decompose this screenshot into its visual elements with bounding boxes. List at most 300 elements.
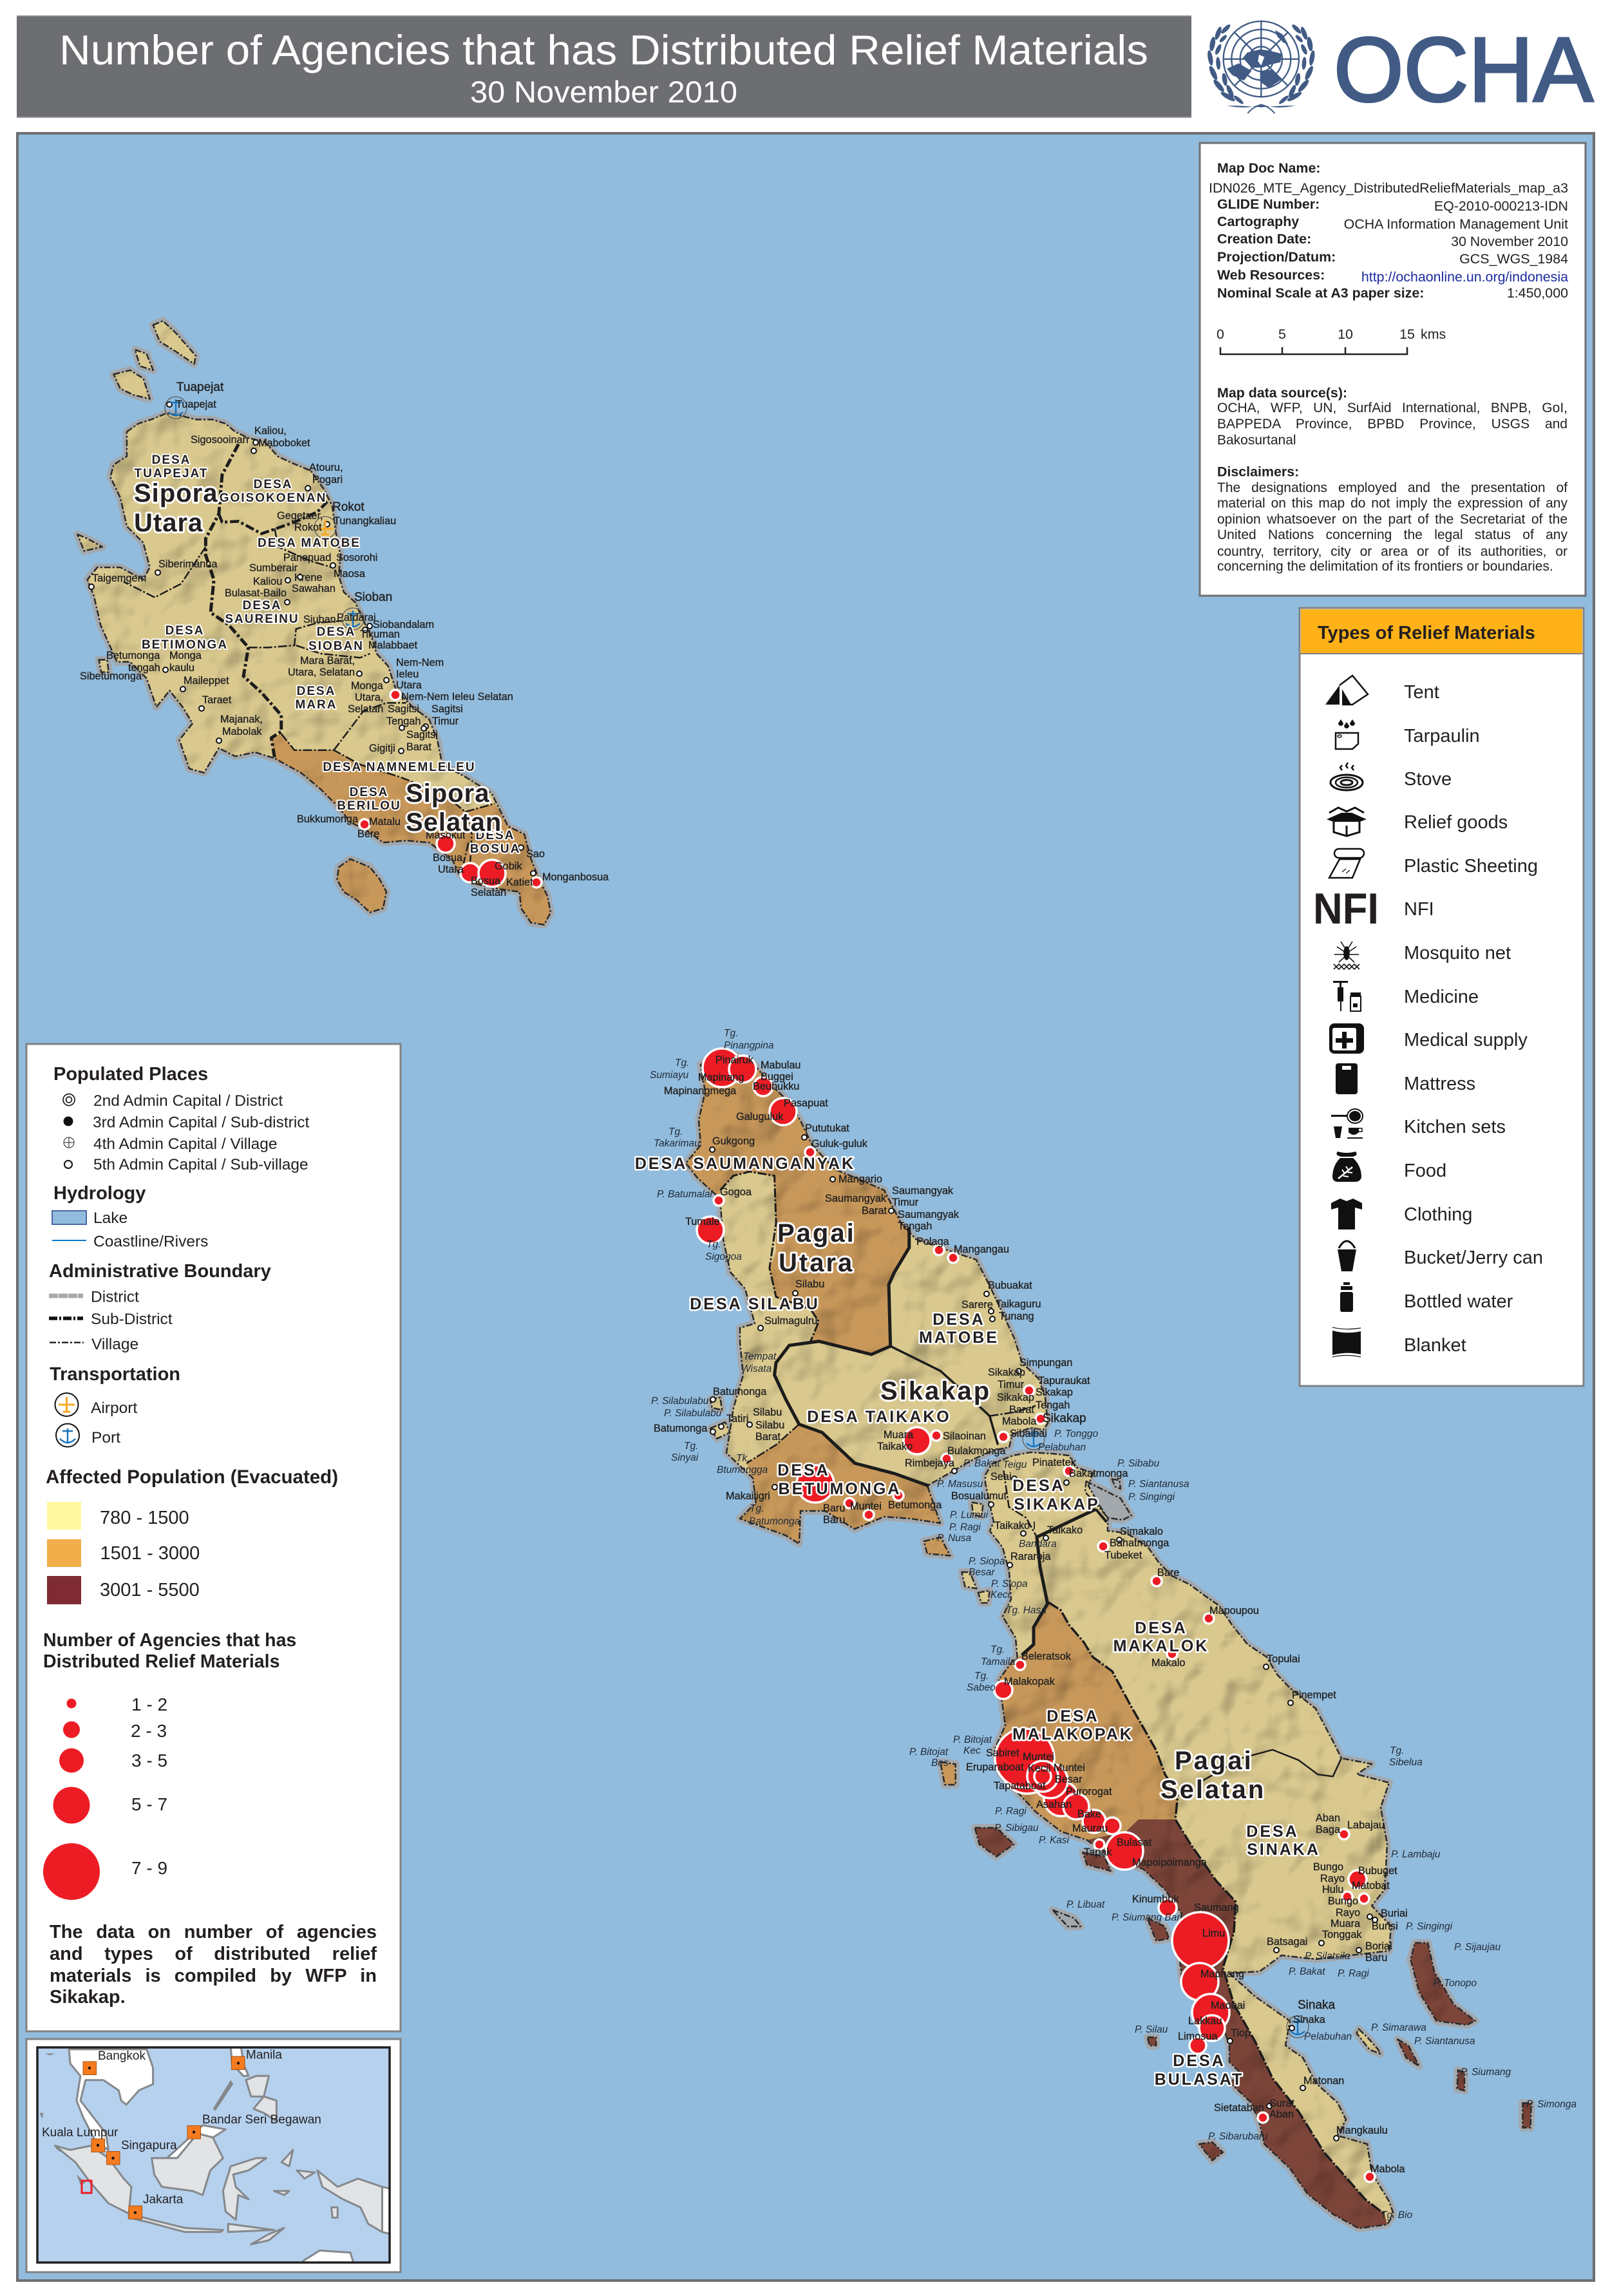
map: Pagai place names: Topulai [1267,1653,1300,1665]
map: Pagai place names: Sibaibai [1010,1428,1047,1439]
map: Pagai place names: Tapataboat [994,1780,1046,1792]
map: Pagai village (desa) labels: MAKALOK [1113,1637,1209,1655]
map: capes and island names: Kec [963,1745,981,1756]
panel: map information: GLIDE Number: [1217,196,1320,212]
title banner: 30 November 2010 [470,75,737,109]
map: Sipora village (desa) labels: MARA [295,698,337,712]
map: Pagai place names: Tengah [1036,1399,1070,1411]
legend: populated places: Populated Places [53,1064,208,1085]
map: capes and island names: P. Tonopo [1433,1978,1477,1989]
map: capes and island names: Tg. [724,1028,738,1039]
map: capes and island names: P. Sibabu [1117,1458,1160,1469]
inset: capital names: Singapura [121,2139,177,2152]
inset: capital names: Bandar Seri Begawan [202,2113,321,2127]
map: Pagai place names: Tonggak [1322,1929,1362,1940]
map: Pagai place names: Saumangyak [898,1209,960,1220]
legend: hydrology: Coastline/Rivers [93,1233,208,1251]
map: Sipora place names: Maosa [334,568,366,580]
map: Sipora place names: Mabolak [222,726,262,737]
map: Sipora village (desa) labels: SAUREINU [225,612,299,626]
text: Sikakap. [50,1986,126,2007]
panel: legend [26,1044,401,2031]
relief material names: Blanket [1404,1335,1466,1356]
map: Sipora place names: Bosua [471,875,501,887]
map: Pagai place names: Muara [884,1429,914,1441]
panel: map information: Projection/Datum: [1217,249,1336,265]
legend: transportation: Transportation [50,1364,180,1385]
map: capes and island names: P. Bakat [1289,1966,1325,1977]
map: Pagai place names: Limosua [1178,2031,1218,2042]
title banner: Number of Agencies that has Distributed Relief Materials [59,26,1148,73]
map: Sipora village (desa) labels: DESA [476,829,515,842]
map: Pagai place names: Silabu [795,1278,824,1290]
map: Pagai place names: Pinempet [1292,1689,1336,1701]
icon: bottled water [1340,1282,1353,1312]
map: Pagai place names: Taikaguru [996,1298,1041,1310]
map: Sipora place names: Utara [438,864,464,875]
map: Sipora village (desa) labels [135,453,520,856]
map: Sipora place names: Tunangkaliau [334,515,396,527]
map: Pagai place names: Purorogat [1066,1786,1112,1798]
map: Sipora place names: Malabbaet [368,640,418,651]
map: Sipora place names: Betumonga [106,650,160,661]
map: Sipora place names: Sumberair [249,562,298,574]
map: Pagai place names: Muara [1331,1918,1361,1930]
map: Sipora place names: Katiet [506,877,533,888]
map: Sipora place names: Utara, Selatan [288,667,355,678]
map: capes and island names: Tg. [1390,1745,1404,1756]
map: capes and island names: P. Bitojat [909,1747,949,1758]
map: Sipora place names: Pogari [312,474,343,486]
map: Pagai place names: Tapuraukat [1038,1375,1090,1387]
inset: study area marker [82,2181,91,2193]
map: Pagai place names: Sarere [961,1299,993,1311]
panel: map information: GCS_WGS_1984 [1459,251,1568,267]
map: Sipora place names: Utara [396,679,422,691]
map: capes and island names: Pinangpina [724,1040,774,1051]
icon: kitchen sets [1331,1109,1363,1139]
relief material names: Stove [1404,769,1452,790]
relief material names [1404,682,1543,1356]
map: capes and island names: P. Kasi [1039,1835,1070,1846]
map: Pagai place names: Silabu [753,1407,782,1418]
relief material names: Plastic Sheeting [1404,856,1538,877]
panel: map information: OCHA Information Management Unit [1344,216,1568,232]
map: sub-district capital names: Sioban [354,591,392,604]
text: concerning the delimitation of its frontiers or boundaries. [1217,559,1553,574]
map: capes and island names: P. Libuat [1066,1899,1105,1910]
panel: map information: Creation Date: [1217,231,1311,247]
map: Sipora village (desa) labels: SIOBAN [308,640,364,653]
map: Pagai place names: Batumonga [654,1423,708,1434]
map: Pagai place names: Surat [1269,2098,1294,2109]
map: sub-district capital names: Rokot [332,500,365,514]
map: capes and island names: P. Lumui [950,1510,989,1521]
map: capes and island names: P. Sibigau [994,1823,1039,1834]
map: capes and island names: Tg. [668,1126,683,1137]
panel: map information: 1:450,000 [1507,285,1568,301]
map: Pagai place names: Matonan [1303,2075,1344,2087]
map: capes and island names: P. Bitojat [953,1734,992,1745]
map: Pagai place names: Polaga [916,1236,950,1248]
map: Pagai place names: Rararoja [1010,1551,1051,1562]
panel: map information: Web Resources: [1217,267,1325,283]
map: Sipora place names: Tengah [386,716,421,727]
map: Pagai place names: Baru [823,1514,845,1526]
map: Pagai place names: Bulasat [1117,1837,1152,1848]
panel: map information: 30 November 2010 [1451,234,1568,249]
map: sub-district labels: Selatan [406,808,502,837]
panel: map information: Disclaimers: [1217,464,1299,479]
icon: blanket [1332,1327,1361,1357]
map: Sipora village (desa) labels: DESA [254,478,292,491]
map: Pagai place names: Sikakap [988,1367,1025,1378]
map: Pagai place names: Saumang [1194,1902,1239,1913]
legend: transportation: Airport [91,1399,137,1417]
map: sub-district labels: Utara [134,509,203,537]
map: Pagai village (desa) labels: DESA [1246,1823,1299,1841]
panel: map information: Nominal Scale at A3 paper size: [1217,285,1424,301]
legend: populated places [53,1064,310,1173]
map: Sipora place names: Gobik [495,860,522,872]
map: capes and island names: P. Silau [1135,2024,1168,2035]
icon: medical supply [1329,1023,1364,1054]
map: capes and island names: P. Siopa [969,1556,1005,1567]
map: Sipora place names: kaulu [169,662,194,674]
map: Pagai village (desa) labels: DESA [777,1461,830,1479]
map: capes and island names: P. Sibarubaru [1208,2131,1268,2142]
legend: administrative boundary [49,1261,271,1353]
inset: capital names: Kuala Lumpur [42,2126,118,2139]
map: Pagai place names: Saumangyak [892,1185,954,1197]
icon: tarpaulin [1336,719,1358,749]
inset: capital markers [83,2056,245,2219]
relief material names: Mattress [1404,1074,1475,1094]
map: capes and island names: P. Siantanusa [1128,1479,1189,1490]
map: Pagai place names: Maurau [1072,1823,1108,1834]
map: capes and island names: Tg. [990,1644,1005,1655]
map: capes and island names: Takarimau [654,1138,700,1149]
map: Sipora place names: Tuapejat [176,399,216,410]
map: Sipora place names: Masokut [426,830,466,841]
text: country, territory, city or area or of its authorities, or [1217,544,1567,559]
legend: populated places: 5th Admin Capital / Sub-village [93,1156,308,1173]
map: Pagai place names: Buggei [761,1071,793,1083]
legend: administrative boundary: Administrative Boundary [49,1261,271,1282]
legend: affected population [46,1466,338,1604]
legend: administrative boundary: Sub-District [91,1311,173,1328]
text: Bakosurtanal [1217,433,1296,447]
map: capes and island names: P. Siantanusa [1414,2036,1475,2047]
panel: regional inset map [26,2039,401,2272]
map: Pagai place names: Barat [1009,1404,1034,1416]
map: Sipora place names: Kaliou [253,576,282,587]
map: capes and island names: Sabeo [967,1682,996,1693]
text: OCHA, WFP, UN, SurfAid International, BNPB, GoI, [1217,401,1567,415]
map: capes and island names: Tamaila [981,1656,1016,1667]
map: capes and island names: Sumiayu [650,1070,689,1081]
map: Pagai place names: Bakatmonga [1069,1468,1128,1479]
map: Pagai place names: Taikako I [994,1520,1036,1532]
map: Sipora place names: Sigosooinan [191,434,249,446]
map: Pagai place names: Pasapuat [784,1097,828,1109]
map: Sipora place names: Sagitsi [406,729,438,741]
map: Sipora place names: Atouru, [309,462,343,473]
map: Pagai place names: Baru [823,1503,845,1514]
scale bar: kms [1421,327,1446,342]
legend: hydrology: Lake [93,1210,128,1227]
map: Sipora place names: Ieleu [396,669,419,680]
map: Sipora place names: Gigitji [369,743,395,754]
map: Pagai place names: Taikako [1047,1524,1083,1536]
map: Sipora place names: Sibetumonga [80,670,142,682]
map: Pagai place names: Bahatmonga [1110,1537,1170,1549]
map: Pagai place names: Besar [1055,1774,1083,1785]
map: administrative boundaries [124,444,1385,2214]
map: Pagai place names: Malakopak [1004,1676,1056,1687]
text: United Nations concerning the legal status of any [1217,527,1567,542]
map: Pagai place names: Mangangau [954,1244,1009,1255]
legend: number of agencies: 2 - 3 [131,1721,167,1741]
text block: map data sources [1217,401,1567,447]
map: Pagai place names: Bare [1157,1567,1179,1579]
map: Pagai village (desa) labels [635,1155,1320,2089]
map: Sipora village (desa) labels: GOISOKOENAN [220,491,327,505]
map: Pagai place names: Silaoinan [943,1430,986,1442]
map: islands land base [77,321,1531,2228]
scale bar: 0 [1217,327,1224,342]
panel: types of relief materials: Types of Relief Materials [1318,623,1535,643]
relief material names: Mosquito net [1404,943,1511,963]
legend: number of agencies: 7 - 9 [131,1858,167,1878]
map: capes and island names: Batumonga [749,1516,800,1527]
map: Pagai place names: Tapak [1084,1846,1112,1858]
map: Pagai place names: Timur [892,1197,919,1208]
map: Pagai village (desa) labels: DESA [1012,1477,1065,1495]
map: Pagai place names: Seai [990,1471,1012,1483]
relief material names: Medicine [1404,987,1479,1007]
map: Pagai village (desa) labels: MATOBE [919,1329,999,1347]
map: Pagai place names: Sulmagulru [764,1315,817,1327]
map: port and airport symbols [165,397,1309,2038]
map: Pagai village (desa) labels: BULASAT [1155,2071,1244,2089]
map: capes and island names: P. Nusa [937,1533,972,1544]
map: Pagai place names: Mapinang [698,1072,744,1083]
legend: administrative boundary: Village [91,1336,138,1353]
map: capes and island names: Tg. [675,1058,689,1068]
map: Pagai place names: Silabu [755,1419,784,1431]
map: Pagai place names: Mapoupou [1209,1605,1259,1617]
relief material names: NFI [1404,899,1434,920]
map: Sipora place names: Tikuman [360,629,400,640]
map: Pagai place names: Bosualumut [951,1490,1007,1502]
relief material names: Clothing [1404,1204,1472,1225]
map: Pagai place names: Bulakmonga [947,1445,1006,1457]
panel: types of relief materials [1300,608,1584,1386]
map: Sipora place names: Krene [294,572,322,583]
map: capes and island names: Tg. [974,1671,989,1682]
icon: relief goods box [1329,808,1364,836]
map: Sipora place names: Rokot [294,522,322,533]
icon: food sack [1332,1152,1361,1182]
legend: affected population: Affected Population (Evacuated) [46,1466,338,1488]
scale bar [1217,327,1446,354]
map: capes and island names: P. Ragi [949,1522,981,1533]
text: BAPPEDA Province, BPBD Province, USGS and [1217,417,1567,432]
inset: capital names: Jakarta [143,2193,184,2206]
map: Pagai place names: Asahan [1036,1799,1072,1810]
map: Sipora place names: Timur [432,716,459,727]
map: sub-district capital names: Sinaka [1298,1998,1336,2012]
map: Pagai place names: Lakkau [1188,2015,1222,2027]
map: Sipora place names: Kaliou, [254,425,287,437]
map: Sipora place names: Majanak, [220,714,263,725]
map: Pagai place names: Simpungan [1019,1357,1072,1369]
scale bar: 15 [1399,327,1415,342]
map: Sipora place names: Sagitsi [431,703,463,715]
map: capes and island names: Tk. [736,1453,750,1464]
map: Sipora place names: Matalu [369,816,401,828]
map: Pagai place names [654,1054,1408,2175]
map: Sipora place names: Bukkumonga [297,813,359,825]
map: Sipora place names: Taraet [202,694,232,706]
map: Sipora place names: Barat [406,741,431,753]
legend: hydrology: Hydrology [53,1183,146,1204]
map: sub-district labels: Utara [779,1249,854,1277]
map: Sipora place names: Siobandalam [373,619,434,631]
map: Sipora place names: Siberimanua [158,558,218,570]
map: Sipora place names: Selatan [348,703,383,715]
legend: number of agencies: 5 - 7 [131,1794,167,1814]
map: capes and island names: Tg. Hasa [1006,1605,1046,1616]
map: Pagai place names: Betumonga [888,1499,942,1511]
map: Sipora village (desa) labels: DESA [166,624,204,638]
map: Pagai place names: Makalo [1151,1657,1185,1669]
map: Pagai place names: Mabulau [761,1059,800,1071]
map: Sipora place names: Selatan [471,887,506,898]
map: capes and island names: Tg. Bio [1381,2210,1412,2221]
relief material names: Relief goods [1404,812,1508,833]
map: settlement point markers [89,402,1378,2141]
map: Pagai place names: Sikakap [997,1392,1034,1403]
map: Pagai village (desa) labels: DESA TAIKAKO [807,1408,951,1426]
map: capes and island names: P. Bakat [963,1458,1000,1469]
map: capes and island names: Sigogoa [705,1251,742,1262]
map: Pagai place names: Beubukku [753,1081,799,1092]
map: Pagai place names: Aban [1316,1812,1340,1824]
map: Pagai place names: Gogoa [720,1186,752,1198]
map: Pagai place names: Timur [998,1379,1025,1390]
text: and types of distributed relief [50,1944,377,1964]
map: Pagai village (desa) labels: DESA [1173,2052,1226,2070]
logo: UN OCHA: OCHA [1334,19,1593,121]
map: Pagai place names: Rimbejaya [905,1457,955,1469]
map: Pagai village (desa) labels: DESA [933,1311,985,1329]
map: Sipora village (desa) labels: DESA [350,786,388,799]
map: Pagai place names: Bake [1077,1808,1101,1820]
map: Sipora place names [80,399,609,898]
map: Sipora place names: Bere [357,828,379,840]
map: Pagai place names: Rayo [1320,1873,1345,1884]
map: sub-district labels: Sikakap [880,1377,991,1405]
map: Sipora place names: Utara, [355,692,383,703]
map: capes and island names: Bandara [1019,1539,1057,1550]
map: Pagai place names: Barat [755,1431,781,1443]
map: Pagai place names: Makailigri [726,1490,770,1502]
map: capes and island names: Pelabuhan [1038,1442,1086,1453]
relief material names: Bucket/Jerry can [1404,1248,1543,1268]
map: Pagai place names: Guluk-guluk [811,1138,868,1150]
map: Pagai village (desa) labels: DESA [1135,1619,1188,1637]
map: Pagai place names: Tumale [685,1216,720,1228]
legend: number of agencies: 1 - 2 [131,1694,167,1714]
map: Pagai place names: Mabola [1370,2163,1405,2175]
panel: map information: Cartography [1217,214,1299,229]
map: capes and island names: P. Sijaujau [1454,1942,1501,1953]
inset: capital names: Manila [246,2048,282,2062]
icon: NFI: NFI [1313,884,1379,933]
map: capes and island names [650,1028,1577,2221]
text: opinion whatsoever on the part of the Secretariat of the [1217,512,1567,527]
map: Pagai place names: Limu [1202,1928,1225,1939]
map: Pagai village (desa) labels: SINAKA [1247,1841,1320,1859]
panel: map information: http://ochaonline.un.org/indonesia [1361,269,1568,285]
scale bar: 10 [1338,327,1353,342]
map: Sipora place names: Monganbosua [542,871,609,883]
map: Pagai place names: Hulu [1322,1884,1343,1895]
map: Pagai place names: Sietataban [1214,2102,1264,2114]
map: Pagai place names: Pinairuk [715,1054,754,1066]
map: Pagai village (desa) labels: SIKAKAP [1014,1495,1100,1513]
legend: number of agencies: 3 - 5 [131,1750,167,1770]
map: sub-district labels: Sipora [406,779,489,808]
legend: affected population: 3001 - 5500 [100,1580,200,1600]
inset: capital names [42,2048,321,2206]
relief material names: Bottled water [1404,1291,1513,1312]
map: Pagai place names: Pinatetek [1032,1457,1077,1468]
map: Sipora place names: Sagitsi [388,703,419,715]
map: Pagai place names: Tengah [898,1220,932,1232]
map: Sipora place names: Sawahan [292,583,336,594]
map: capes and island names: P. Siumang [1461,2067,1511,2078]
panel: map information: EQ-2010-000213-IDN [1434,198,1568,214]
map: Pagai place names: Eruparaboat [966,1761,1024,1773]
map: capes and island names: Tg. [684,1441,698,1452]
map: capes and island names: Tempat [743,1351,777,1362]
map: Pagai place names: Burisi [1372,1921,1398,1932]
map: Pagai place names: Muntei [1023,1751,1054,1763]
legend: number of agencies: Number of Agencies that has [43,1630,296,1651]
text: The data on number of agencies [50,1922,377,1942]
map: capes and island names: Wisata [741,1363,772,1374]
map: capes and island names: P. Tonggo [1054,1428,1098,1439]
map: red proportional circles [359,690,1375,2182]
map: Pagai place names: Maobai [1211,2000,1245,2011]
panel: map information [1200,143,1586,596]
map: Pagai place names: Aban [1269,2109,1294,2120]
legend: populated places: 4th Admin Capital / Village [93,1135,278,1153]
map: Sipora village (desa) labels: TUAPEJAT [135,467,208,480]
map: Pagai place names: Galuguluk [736,1111,784,1123]
map: capes and island names: P. Batumalai [657,1189,712,1200]
map: Pagai place names: Pututukat [805,1123,849,1134]
legend: number of agencies: Distributed Relief Materials [43,1651,279,1672]
map: Pagai place names: Buriai [1381,1908,1408,1919]
map: capes and island names: P. Ragi [1338,1968,1369,1979]
map: Pagai place names: Borial [1365,1940,1392,1952]
map: Sipora place names: Patdarai [337,612,376,623]
map: Pagai place names: Kecil [1028,1763,1050,1774]
